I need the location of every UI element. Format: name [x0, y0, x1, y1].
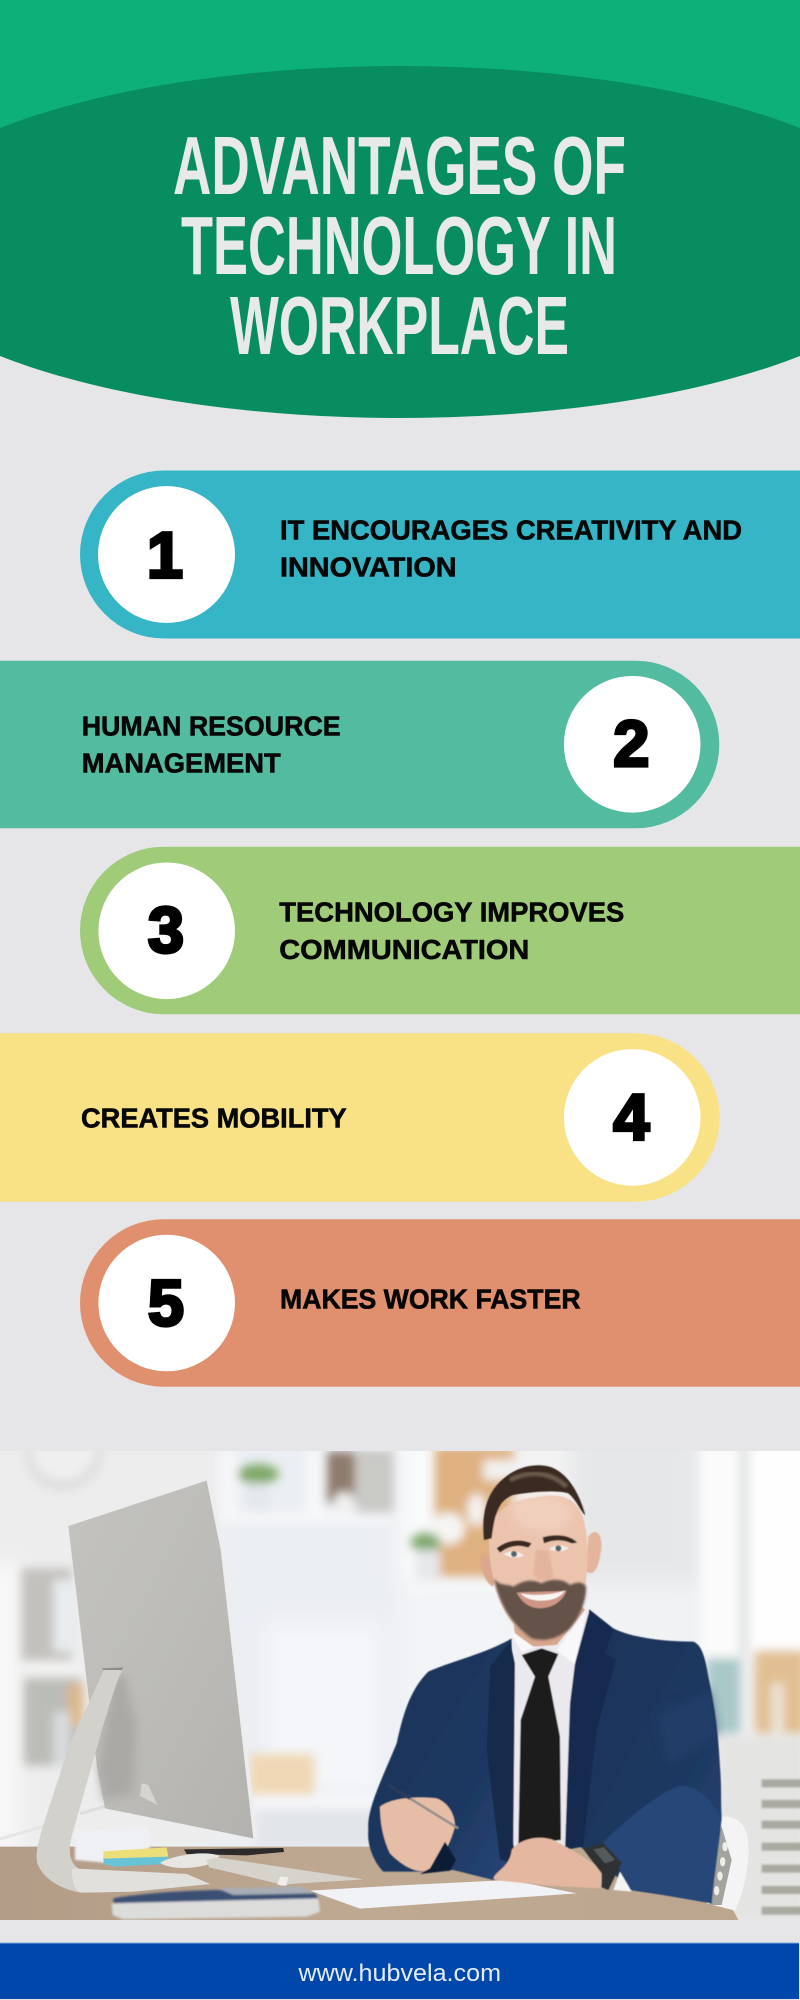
blurred office background	[0, 1451, 687, 1837]
desk	[0, 1847, 738, 1920]
panel: step 1	[80, 470, 800, 638]
hand with ring	[493, 1838, 603, 1888]
panel: step 1: IT ENCOURAGES CREATIVITY AND	[280, 515, 742, 546]
sleeve	[603, 1786, 722, 1903]
chair	[706, 1816, 748, 1910]
monitor back	[68, 1481, 257, 1838]
title: WORKPLACE	[230, 279, 569, 372]
nose	[533, 1550, 553, 1580]
panel: step 2: MANAGEMENT	[82, 748, 281, 779]
suit jacket	[368, 1638, 515, 1880]
footer bar	[0, 1942, 799, 1999]
pen	[388, 1785, 458, 1828]
paper on desk	[310, 1880, 577, 1909]
panel: step 3: 3	[148, 894, 184, 966]
ears	[481, 1553, 497, 1587]
smile	[521, 1591, 565, 1601]
panel: step 1: INNOVATION	[280, 552, 457, 583]
header band	[0, 0, 800, 418]
man	[368, 1465, 722, 1903]
panel: step 4: 4	[613, 1080, 649, 1154]
hair	[483, 1465, 585, 1540]
panel: step 5: 5	[148, 1266, 184, 1340]
panel: step 1: 1	[147, 518, 183, 592]
panel: step 2: HUMAN RESOURCE	[82, 711, 341, 742]
desk items	[75, 1827, 364, 1886]
face	[489, 1496, 588, 1639]
monitor stand	[37, 1670, 210, 1893]
cable	[0, 1805, 105, 1840]
website url: www.hubvela.com	[297, 1960, 501, 1987]
notebook	[112, 1887, 320, 1919]
panel: step 4: CREATES MOBILITY	[81, 1102, 347, 1133]
eyes and brows	[497, 1541, 532, 1553]
shirt	[512, 1608, 590, 1848]
tie	[518, 1648, 561, 1845]
panel: step 5: MAKES WORK FASTER	[280, 1283, 581, 1314]
panel: step 3: TECHNOLOGY IMPROVES	[279, 897, 624, 928]
panel: step 3	[80, 847, 800, 1014]
photo: smiling businessman at desk with computer	[0, 1412, 800, 1923]
panel: step 5	[80, 1219, 800, 1387]
cuff and writing hand	[380, 1798, 455, 1871]
neck	[512, 1590, 585, 1647]
panel: step 2: 2	[613, 707, 649, 780]
watch	[583, 1843, 622, 1890]
panel: step 4	[0, 1033, 720, 1202]
title	[173, 119, 626, 372]
panel: step 2	[0, 661, 719, 828]
lapels	[487, 1642, 517, 1863]
panel: step 3: COMMUNICATION	[279, 934, 529, 965]
beard	[494, 1578, 586, 1640]
